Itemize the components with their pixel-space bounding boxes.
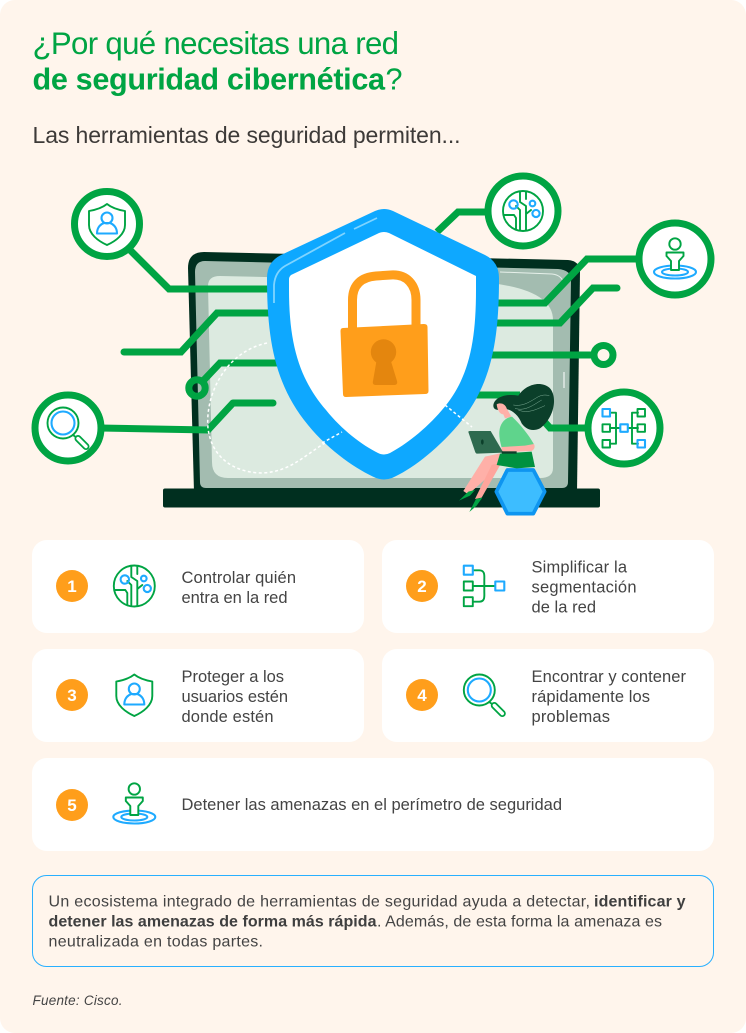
title: ¿Por qué necesitas una red	[32, 26, 399, 61]
callout: neutralizada en todas partes.	[48, 934, 263, 950]
padlock	[340, 275, 428, 397]
hexagon seat	[496, 470, 545, 514]
small laptop	[468, 431, 517, 454]
badge 3: 3	[67, 686, 77, 705]
icon: magnifier	[464, 674, 502, 714]
subtitle: Las herramientas de seguridad permiten...	[32, 122, 460, 148]
card 2	[382, 540, 714, 633]
icon: perimeter person node	[639, 223, 711, 295]
dashed loop	[208, 343, 342, 473]
text 4: rápidamente los	[532, 688, 650, 706]
icon: shield user	[116, 674, 152, 716]
text 3	[182, 668, 288, 726]
icon: perimeter person	[113, 783, 155, 824]
text 4: problemas	[532, 708, 610, 726]
badge 5: 5	[67, 796, 77, 815]
badge 1: 1	[67, 577, 77, 596]
text 1: entra en la red	[182, 589, 288, 607]
callout: detener las amenazas de forma más rápida	[48, 914, 377, 930]
badge 5	[56, 789, 88, 821]
badge 3	[56, 679, 88, 711]
text 3: donde estén	[182, 708, 274, 726]
network traces	[100, 212, 645, 430]
badge 4: 4	[417, 686, 427, 705]
badge 2: 2	[417, 577, 427, 596]
badge 1	[56, 570, 88, 602]
badge 2	[406, 570, 438, 602]
skirt	[497, 452, 535, 468]
text 3: usuarios estén	[182, 688, 288, 706]
card 1	[32, 540, 364, 633]
callout: . Además, de esta forma la amenaza es	[377, 914, 662, 930]
shirt	[499, 417, 534, 448]
text 2: de la red	[532, 598, 596, 616]
badge 4	[406, 679, 438, 711]
legs and shoes	[459, 453, 502, 512]
callout	[32, 876, 714, 966]
shield	[267, 209, 499, 480]
laptop	[163, 252, 600, 508]
callout: Un ecosistema integrado de herramientas de seguridad ayuda a detectar,	[48, 894, 590, 910]
text 3: Proteger a los	[182, 668, 284, 686]
callout: identificar y	[594, 894, 686, 910]
icon: shield user node	[74, 192, 140, 256]
arm	[502, 444, 535, 452]
face	[497, 403, 511, 418]
icon: magnifier node	[35, 395, 101, 461]
title	[32, 26, 403, 96]
text 2: Simplificar la	[532, 558, 628, 576]
woman with laptop on hexagon	[459, 384, 554, 514]
title: de seguridad cibernética	[32, 62, 386, 96]
card 3	[32, 649, 364, 742]
text 1	[182, 569, 296, 607]
source: Fuente: Cisco.	[32, 993, 122, 1008]
icon: segmentation node	[588, 392, 660, 464]
text 4	[532, 668, 686, 726]
text 2	[532, 558, 636, 616]
icon: circuit	[114, 566, 155, 606]
text 2: segmentación	[532, 578, 636, 596]
icon: segmentation	[464, 566, 504, 606]
hair	[493, 384, 554, 430]
icon: circuit node	[488, 176, 558, 246]
text 1: Controlar quién	[182, 569, 296, 587]
text 5: Detener las amenazas en el perímetro de seguridad	[182, 796, 562, 814]
card 4	[382, 649, 714, 742]
illustration: laptop with shield and network	[35, 176, 711, 514]
text 4: Encontrar y contener	[532, 668, 686, 686]
title: ?	[386, 62, 403, 96]
card 5	[32, 758, 714, 851]
